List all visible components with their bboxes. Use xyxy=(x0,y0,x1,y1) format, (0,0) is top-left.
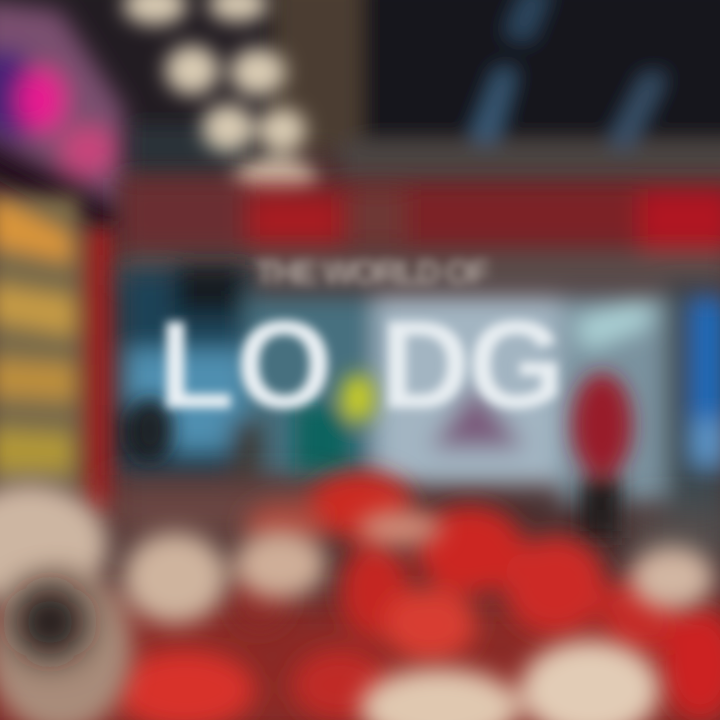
pendant lights: cream cluster xyxy=(123,0,317,206)
large white lettering: LO xyxy=(158,296,333,435)
large white lettering: DG xyxy=(380,296,565,435)
left shelf: product rows xyxy=(0,195,116,513)
floor above the balls xyxy=(0,485,720,720)
large white lettering xyxy=(158,296,565,435)
display screen: panels behind the lettering xyxy=(120,265,720,545)
figures: shoppers in front of the screen xyxy=(130,373,632,538)
blurred dark ball centre: foreground xyxy=(14,586,86,658)
upper sign text: THE WORLD OF xyxy=(255,254,490,292)
red sign band xyxy=(120,178,720,285)
ceiling beams: blue streaks xyxy=(470,70,515,145)
ceiling: dark upper area xyxy=(0,0,720,185)
pile of red and cream balls xyxy=(115,471,720,720)
cream balls xyxy=(0,483,714,720)
left shelf: merchandise display xyxy=(0,0,125,235)
